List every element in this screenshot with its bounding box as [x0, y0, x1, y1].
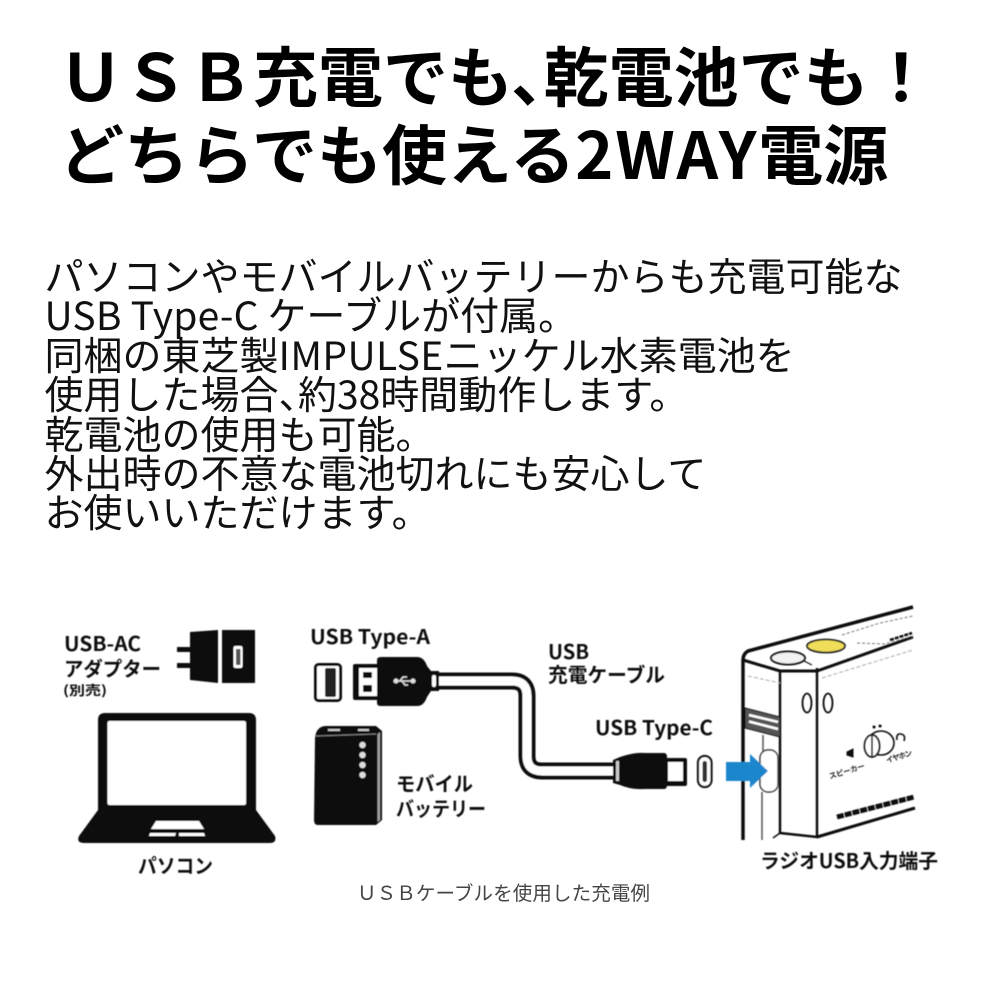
icon: USB Type-C port	[698, 756, 712, 787]
label: mobile battery: バッテリー	[396, 793, 486, 822]
icon: mobile battery	[314, 726, 382, 825]
body text: USB Type-C ケーブルが付属。	[44, 286, 577, 342]
icon: USB-AC adapter	[177, 630, 255, 683]
icon: USB Type-C plug	[613, 753, 687, 789]
body text: お使いいただけます。	[44, 483, 431, 539]
body text: 乾電池の使用も可能。	[44, 405, 435, 461]
label: USB charging cable: USB	[548, 636, 589, 665]
label: USB charging cable: 充電ケーブル	[548, 659, 665, 688]
charging diagram	[63, 607, 938, 879]
title: どちらでも使える2WAY電源	[59, 104, 888, 198]
arrow: blue insert arrow	[726, 754, 768, 788]
label: USB Type-A: USB Type-A	[310, 621, 430, 650]
icon: radio	[743, 607, 915, 840]
label: laptop: パソコン	[138, 850, 213, 879]
label: USB-AC adapter	[63, 628, 161, 699]
body text	[44, 247, 903, 539]
label: mobile battery: モバイル	[396, 768, 473, 797]
label: USB-AC adapter: (別売)	[63, 680, 107, 699]
label: speaker: スピーカー	[828, 761, 866, 782]
body text: パソコンやモバイルバッテリーからも充電可能な	[44, 247, 903, 303]
caption: ＵＳＢケーブルを使用した充電例	[357, 877, 650, 906]
label: USB charging cable	[548, 636, 665, 688]
label: earphone: イヤホン	[885, 747, 914, 766]
cable	[430, 681, 616, 771]
body text: 同梱の東芝製IMPULSEニッケル水素電池を	[44, 326, 795, 382]
label: USB Type-C: USB Type-C	[595, 712, 713, 741]
title: ＵＳＢ充電でも、乾電池でも！	[58, 26, 934, 120]
body text: 使用した場合、約38時間動作します。	[44, 365, 688, 421]
title	[58, 26, 934, 198]
label: USB-AC adapter: アダプター	[64, 653, 161, 682]
icon: USB Type-A port	[316, 664, 340, 700]
body text: 外出時の不意な電池切れにも安心して	[44, 444, 706, 500]
label: mobile battery	[396, 768, 486, 822]
label: radio USB input: ラジオUSB入力端子	[760, 845, 938, 874]
label: USB-AC adapter: USB-AC	[64, 628, 141, 657]
icon: laptop	[78, 713, 275, 843]
icon: USB Type-A plug	[353, 657, 439, 706]
